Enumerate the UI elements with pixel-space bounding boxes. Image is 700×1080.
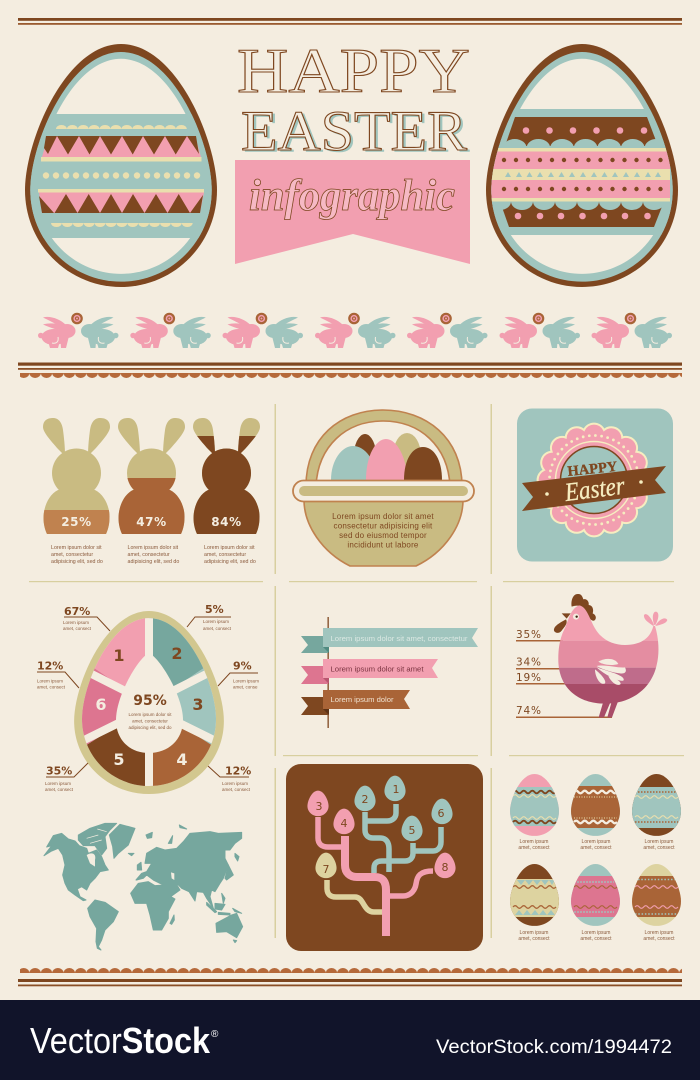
upper divider with scallops xyxy=(18,362,682,379)
basket text: sed do eiusmod tempor xyxy=(339,531,427,540)
title xyxy=(237,35,470,164)
bunny captions: amet, consectetur xyxy=(128,552,170,558)
basket eggs xyxy=(331,433,442,482)
ribbon 3: Lorem ipsum dolor xyxy=(330,695,394,704)
panel: small eggs xyxy=(510,774,681,942)
small egg 3 xyxy=(632,774,681,836)
callout notes: Lorem ipsum xyxy=(203,619,229,624)
small egg captions: Lorem ipsum xyxy=(520,930,548,936)
segment 2 xyxy=(149,618,204,686)
bunny captions: adipisicing elit, sed do xyxy=(51,559,103,565)
small egg 6 xyxy=(632,864,681,926)
bunny captions: Lorem ipsum dolor sit xyxy=(51,545,102,551)
tree egg 3: 3 xyxy=(316,800,322,813)
segment numbers: 5 xyxy=(113,750,125,769)
bunny captions: amet, consectetur xyxy=(51,552,93,558)
tree egg 7 xyxy=(315,853,337,878)
icon: left decorated egg xyxy=(20,44,220,287)
small egg captions: amet, consect xyxy=(643,845,675,851)
basket text xyxy=(332,512,434,550)
basket text: incididunt ut labore xyxy=(347,540,419,550)
hen values: 34% xyxy=(516,656,542,668)
tree egg 3 xyxy=(307,791,329,816)
small egg captions: Lorem ipsum xyxy=(645,839,673,845)
bunny captions: Lorem ipsum dolor sit xyxy=(204,545,255,551)
callout lines xyxy=(37,617,258,777)
center egg xyxy=(116,653,183,753)
callout notes: Lorem ipsum xyxy=(37,678,63,684)
callout notes: amet, consect xyxy=(37,684,66,690)
badge scalloped seal xyxy=(538,424,650,536)
subtitle banner xyxy=(235,160,470,264)
callout notes xyxy=(37,619,259,792)
panel: egg segment chart xyxy=(37,600,259,800)
footer logo: VectorStock xyxy=(30,1020,211,1061)
hen eye xyxy=(573,614,579,620)
center text: amet, consectetur xyxy=(132,718,168,724)
tree egg 2 xyxy=(354,786,376,811)
segment numbers xyxy=(95,644,204,769)
panel: egg tree xyxy=(286,764,483,951)
bunny captions: adipisicing elit, sed do xyxy=(204,559,256,565)
tree egg 4: 4 xyxy=(340,817,348,830)
tree egg 7: 7 xyxy=(322,863,330,876)
bunny 47% xyxy=(118,418,185,534)
small egg captions: amet, consect xyxy=(643,936,675,942)
tree egg 6: 6 xyxy=(438,807,444,820)
bunny captions: Lorem ipsum dolor sit xyxy=(128,545,179,551)
ribbon 2 xyxy=(301,659,438,684)
center value: 95% xyxy=(133,693,167,709)
bunny 25%: 25% xyxy=(61,515,92,529)
bunny 84% xyxy=(193,418,260,534)
bunny 47%: 47% xyxy=(136,515,167,529)
lower divider with scallops xyxy=(18,968,682,986)
title: EASTER xyxy=(241,100,467,163)
top rule xyxy=(18,18,682,25)
small egg captions: Lorem ipsum xyxy=(582,930,610,936)
segment 5 xyxy=(87,728,146,786)
callout values: 35% xyxy=(46,764,72,778)
callout notes: Lorem ipsum xyxy=(233,678,259,684)
hen values: 74% xyxy=(516,705,542,717)
ribbon 3 xyxy=(301,690,410,715)
bunny captions xyxy=(51,545,256,565)
bunnies row xyxy=(38,313,672,348)
callout values: 9% xyxy=(233,660,252,672)
badge Easter script: Easter xyxy=(562,471,627,507)
dividers xyxy=(29,404,684,938)
hen values: 19% xyxy=(516,672,542,684)
panel: egg basket xyxy=(293,410,474,566)
hen wing xyxy=(595,659,626,685)
segment 4 xyxy=(150,728,211,786)
hen tail xyxy=(644,612,667,626)
hen beak and wattle xyxy=(554,613,571,633)
small egg 5 xyxy=(571,864,620,926)
badge HAPPY text: HAPPY xyxy=(567,459,619,480)
tree egg 5: 5 xyxy=(408,824,416,837)
callout values: 12% xyxy=(37,660,63,672)
small egg captions: Lorem ipsum xyxy=(520,839,548,845)
segment 6 xyxy=(82,668,122,744)
tree egg 8: 8 xyxy=(442,861,448,874)
segment 3 xyxy=(176,668,216,744)
tree egg 4 xyxy=(333,809,355,834)
callout notes: amet, consect xyxy=(203,626,232,631)
footer band xyxy=(0,1000,700,1080)
ribbon 2: Lorem ipsum dolor sit amet xyxy=(330,664,424,674)
footer url: VectorStock.com/1994472 xyxy=(436,1037,672,1058)
tree egg 1: 1 xyxy=(392,783,400,796)
callout values: 12% xyxy=(225,764,251,778)
bunny 25% xyxy=(43,418,110,534)
bunny captions: adipisicing elit, sed do xyxy=(128,559,179,565)
small egg captions: amet, consect xyxy=(518,936,550,942)
callout notes: Lorem ipsum xyxy=(222,781,248,786)
panel: ribbons list xyxy=(301,617,478,728)
tree egg 8 xyxy=(434,853,456,878)
panel: hen chart xyxy=(516,594,667,718)
title: HAPPY xyxy=(237,35,470,106)
segment 1 xyxy=(94,618,149,686)
tree egg 6 xyxy=(431,799,453,824)
callout values xyxy=(37,603,252,778)
center text: Lorem ipsum dolor sit xyxy=(128,712,172,717)
ribbon 1: Lorem ipsum dolor sit amet, consectetur xyxy=(330,634,468,643)
tree egg 1 xyxy=(384,776,406,801)
small egg captions: Lorem ipsum xyxy=(645,930,673,936)
world map xyxy=(44,823,243,950)
tree egg 2: 2 xyxy=(362,793,368,806)
basket text: Lorem ipsum dolor sit amet xyxy=(332,512,434,521)
panel: happy easter badge xyxy=(517,408,673,562)
hen comb xyxy=(571,594,596,621)
callout notes: Lorem ipsum xyxy=(63,620,89,625)
icon: right decorated egg xyxy=(480,44,680,287)
center text xyxy=(128,712,172,730)
subtitle banner: infographic xyxy=(249,171,455,220)
callout notes: amet, conse xyxy=(233,684,258,690)
segment numbers: 4 xyxy=(176,750,188,769)
center text: adipiscing elit, sed do xyxy=(128,725,172,730)
hen values: 35% xyxy=(516,629,542,641)
small egg 4 xyxy=(510,864,559,926)
small egg 1 xyxy=(510,774,559,836)
basket text: consectetur adipisicing elit xyxy=(334,522,433,530)
small egg captions: amet, consect xyxy=(518,845,550,851)
small egg captions: amet, consect xyxy=(580,845,612,851)
ribbon 1 xyxy=(301,628,478,653)
segment numbers: 2 xyxy=(171,644,183,663)
segment numbers: 1 xyxy=(113,646,125,665)
callout values: 5% xyxy=(205,603,224,616)
hen body xyxy=(558,606,658,704)
tree branches xyxy=(318,804,441,936)
tree eggs xyxy=(307,776,456,878)
footer registered mark: ® xyxy=(211,1029,219,1040)
basket rim xyxy=(293,480,474,502)
small egg 2 xyxy=(571,774,620,836)
small egg captions: amet, consect xyxy=(580,936,612,942)
hen drawing xyxy=(550,594,667,717)
hen values xyxy=(516,629,542,717)
segment numbers: 6 xyxy=(95,695,107,714)
badge ribbon xyxy=(522,466,666,511)
callout notes: amet, consect xyxy=(45,787,74,792)
hen legs xyxy=(599,701,618,717)
callout notes: amet, consect xyxy=(222,787,251,792)
title: EASTER xyxy=(244,102,470,164)
hen lines xyxy=(516,640,612,718)
small egg captions: Lorem ipsum xyxy=(582,839,610,845)
callout values: 67% xyxy=(64,605,90,618)
small egg captions xyxy=(518,839,675,942)
segment numbers: 3 xyxy=(192,695,204,714)
basket body xyxy=(304,500,463,566)
bunny captions: amet, consectetur xyxy=(204,552,246,558)
callout notes: amet, consect xyxy=(63,626,92,631)
basket handle xyxy=(306,410,462,486)
bunny 84%: 84% xyxy=(211,515,242,529)
panel: bunny percentage charts xyxy=(40,418,265,565)
tree egg 5 xyxy=(401,816,423,841)
callout notes: Lorem ipsum xyxy=(45,781,71,786)
